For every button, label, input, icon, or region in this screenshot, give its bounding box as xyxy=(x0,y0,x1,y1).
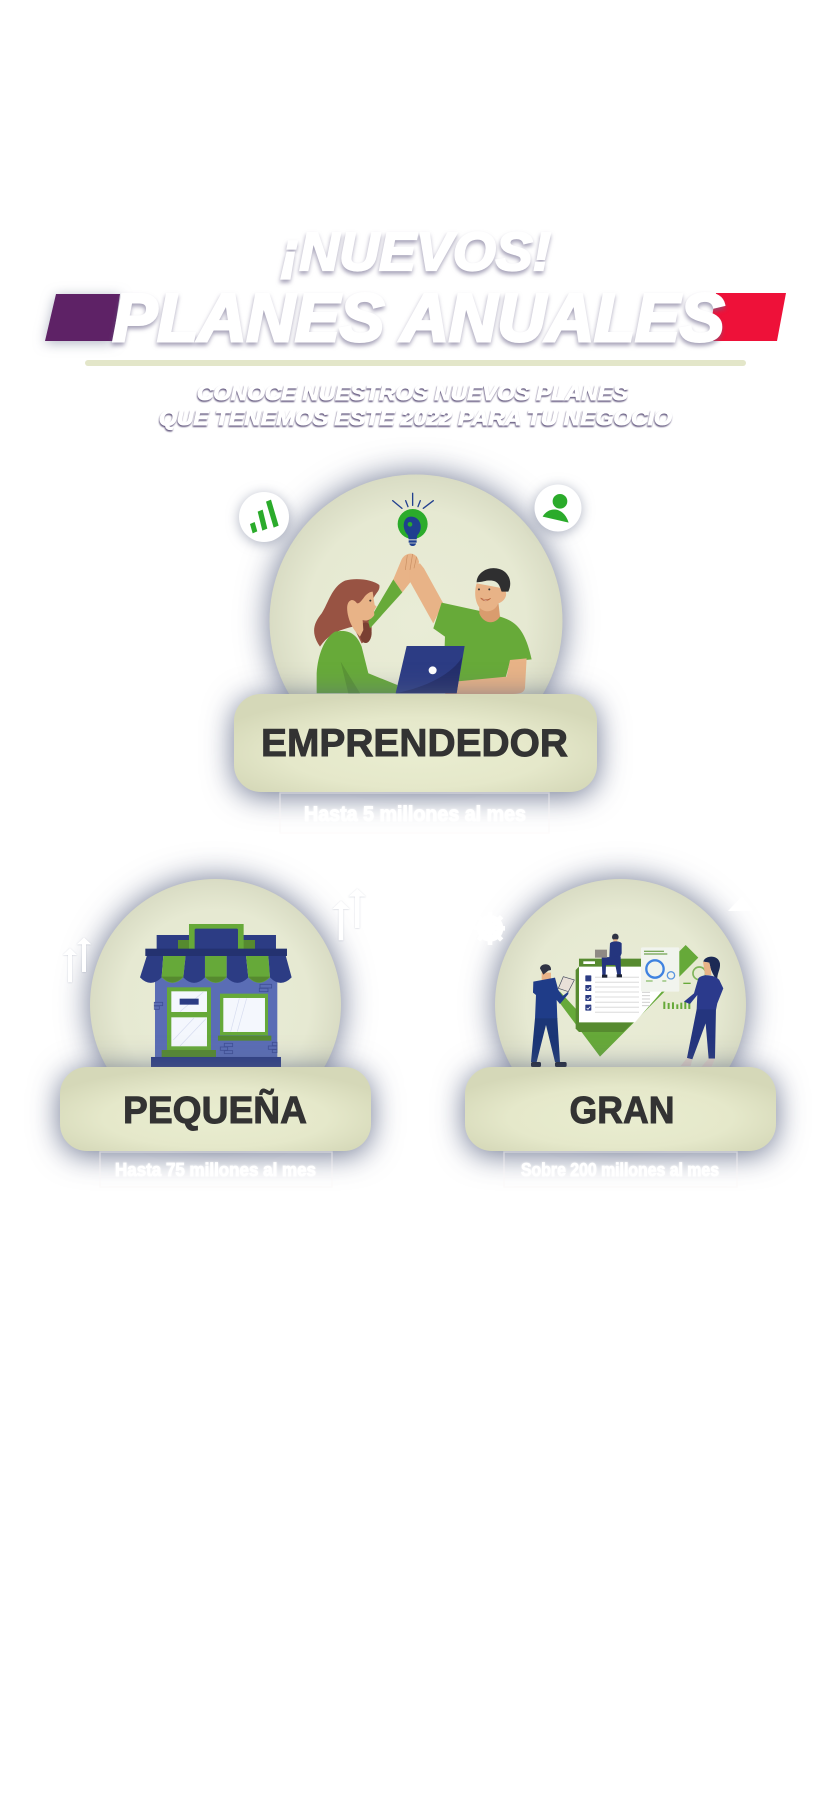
income caption: Hasta 75 millones al mes xyxy=(115,1160,316,1180)
circle backdrop xyxy=(90,879,341,1130)
woman presenting xyxy=(681,957,723,1067)
subtitle: CONOCE NUESTROS NUEVOS PLANES xyxy=(197,382,628,405)
name bar xyxy=(234,694,597,792)
man xyxy=(405,554,532,694)
circle backdrop xyxy=(495,879,746,1130)
subtitle: QUE TENEMOS ESTE 2022 PARA TU NEGOCIO xyxy=(159,407,672,430)
name bar: EMPRENDEDOR xyxy=(261,722,568,765)
laptop xyxy=(396,646,465,693)
illustration: shop xyxy=(140,924,292,1067)
title: nuevos: ¡NUEVOS! xyxy=(281,222,551,282)
income caption xyxy=(504,1152,737,1187)
illustration: team and dashboard xyxy=(531,934,723,1067)
purple banner segment xyxy=(45,294,120,341)
income caption: Hasta 5 millones al mes xyxy=(304,803,526,826)
panel: emprendedor xyxy=(234,474,597,833)
name bar xyxy=(465,1067,776,1151)
man with clipboard xyxy=(531,964,574,1067)
person sitting on document xyxy=(595,934,622,978)
panel: gran xyxy=(465,879,776,1187)
icon: light bulb xyxy=(393,493,433,546)
header xyxy=(45,222,786,430)
icon: growth arrows xyxy=(63,889,366,982)
icon: white arrow tip xyxy=(728,896,754,911)
income caption: Sobre 200 millones al mes xyxy=(521,1160,719,1180)
income caption xyxy=(280,793,549,833)
illustration: high five with laptop xyxy=(314,493,532,694)
title: planes anuales: PLANES ANUALES xyxy=(112,280,724,356)
income caption xyxy=(100,1152,332,1187)
green chevron backdrop xyxy=(555,945,698,1057)
icon: white gear xyxy=(473,912,505,945)
name bar: GRAN xyxy=(570,1090,674,1132)
document xyxy=(579,967,667,1022)
red banner segment xyxy=(708,293,786,341)
circle backdrop xyxy=(270,474,562,768)
subtitle xyxy=(159,382,672,430)
icon: person badge xyxy=(534,484,582,532)
chart card xyxy=(641,947,706,1009)
panel: pequeña xyxy=(60,879,371,1187)
name bar: PEQUEÑA xyxy=(123,1088,307,1132)
name bar xyxy=(60,1067,371,1151)
icon: bar chart badge xyxy=(239,492,289,542)
divider line xyxy=(85,360,746,366)
woman xyxy=(314,554,419,693)
